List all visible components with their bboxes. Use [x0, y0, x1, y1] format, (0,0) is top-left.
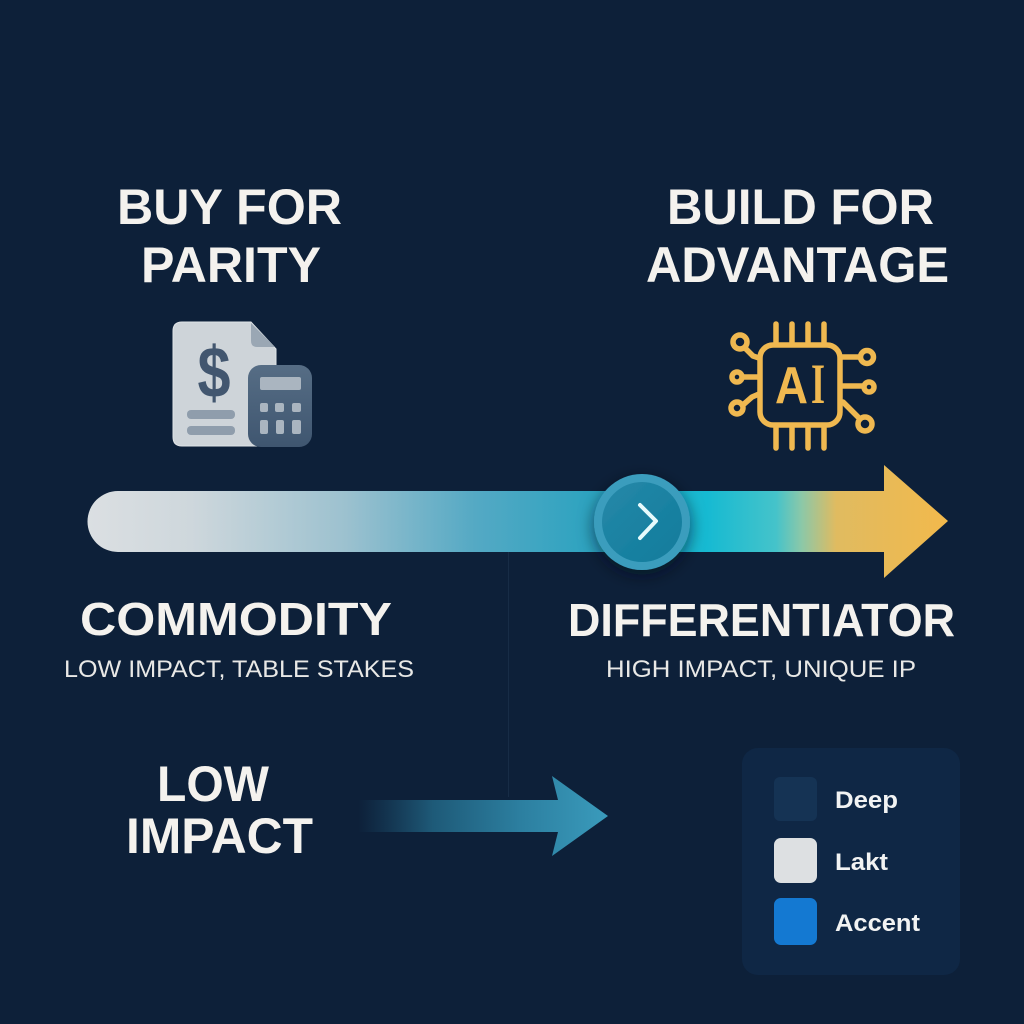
icon: AI chip: I	[811, 353, 825, 416]
label: commodity: LOW IMPACT, TABLE STAKES	[64, 656, 414, 683]
thin vertical connector	[508, 552, 509, 797]
label: low impact: LOW	[157, 756, 270, 812]
slider knob	[594, 474, 690, 570]
icon: invoice and calculator	[173, 322, 312, 447]
icon: AI chip	[731, 324, 874, 448]
label: differentiator: DIFFERENTIATOR	[568, 594, 955, 646]
label: commodity: COMMODITY	[80, 593, 392, 645]
legend item: lakt: Lakt	[835, 849, 888, 876]
label: commodity	[64, 593, 414, 683]
main spectrum arrow	[87, 465, 948, 578]
legend item: lakt	[774, 838, 888, 883]
heading: buy for parity: BUY FOR	[117, 179, 342, 235]
legend panel	[742, 748, 960, 975]
legend item: deep	[774, 777, 898, 821]
low impact arrow	[358, 776, 608, 856]
label: differentiator: HIGH IMPACT, UNIQUE IP	[606, 656, 916, 683]
heading: build for advantage: ADVANTAGE	[646, 237, 949, 293]
heading: buy for parity: PARITY	[141, 237, 321, 293]
heading: build for advantage	[646, 179, 949, 293]
label: differentiator	[568, 594, 955, 683]
label: low impact: IMPACT	[126, 808, 313, 864]
legend item: accent: Accent	[835, 910, 920, 937]
label: low impact	[126, 756, 313, 864]
heading: buy for parity	[117, 179, 342, 293]
heading: build for advantage: BUILD FOR	[667, 179, 934, 235]
icon: invoice and calculator: $	[198, 333, 230, 413]
legend item: deep: Deep	[835, 787, 898, 814]
legend item: accent	[774, 898, 920, 945]
icon: AI chip: A	[775, 357, 808, 415]
